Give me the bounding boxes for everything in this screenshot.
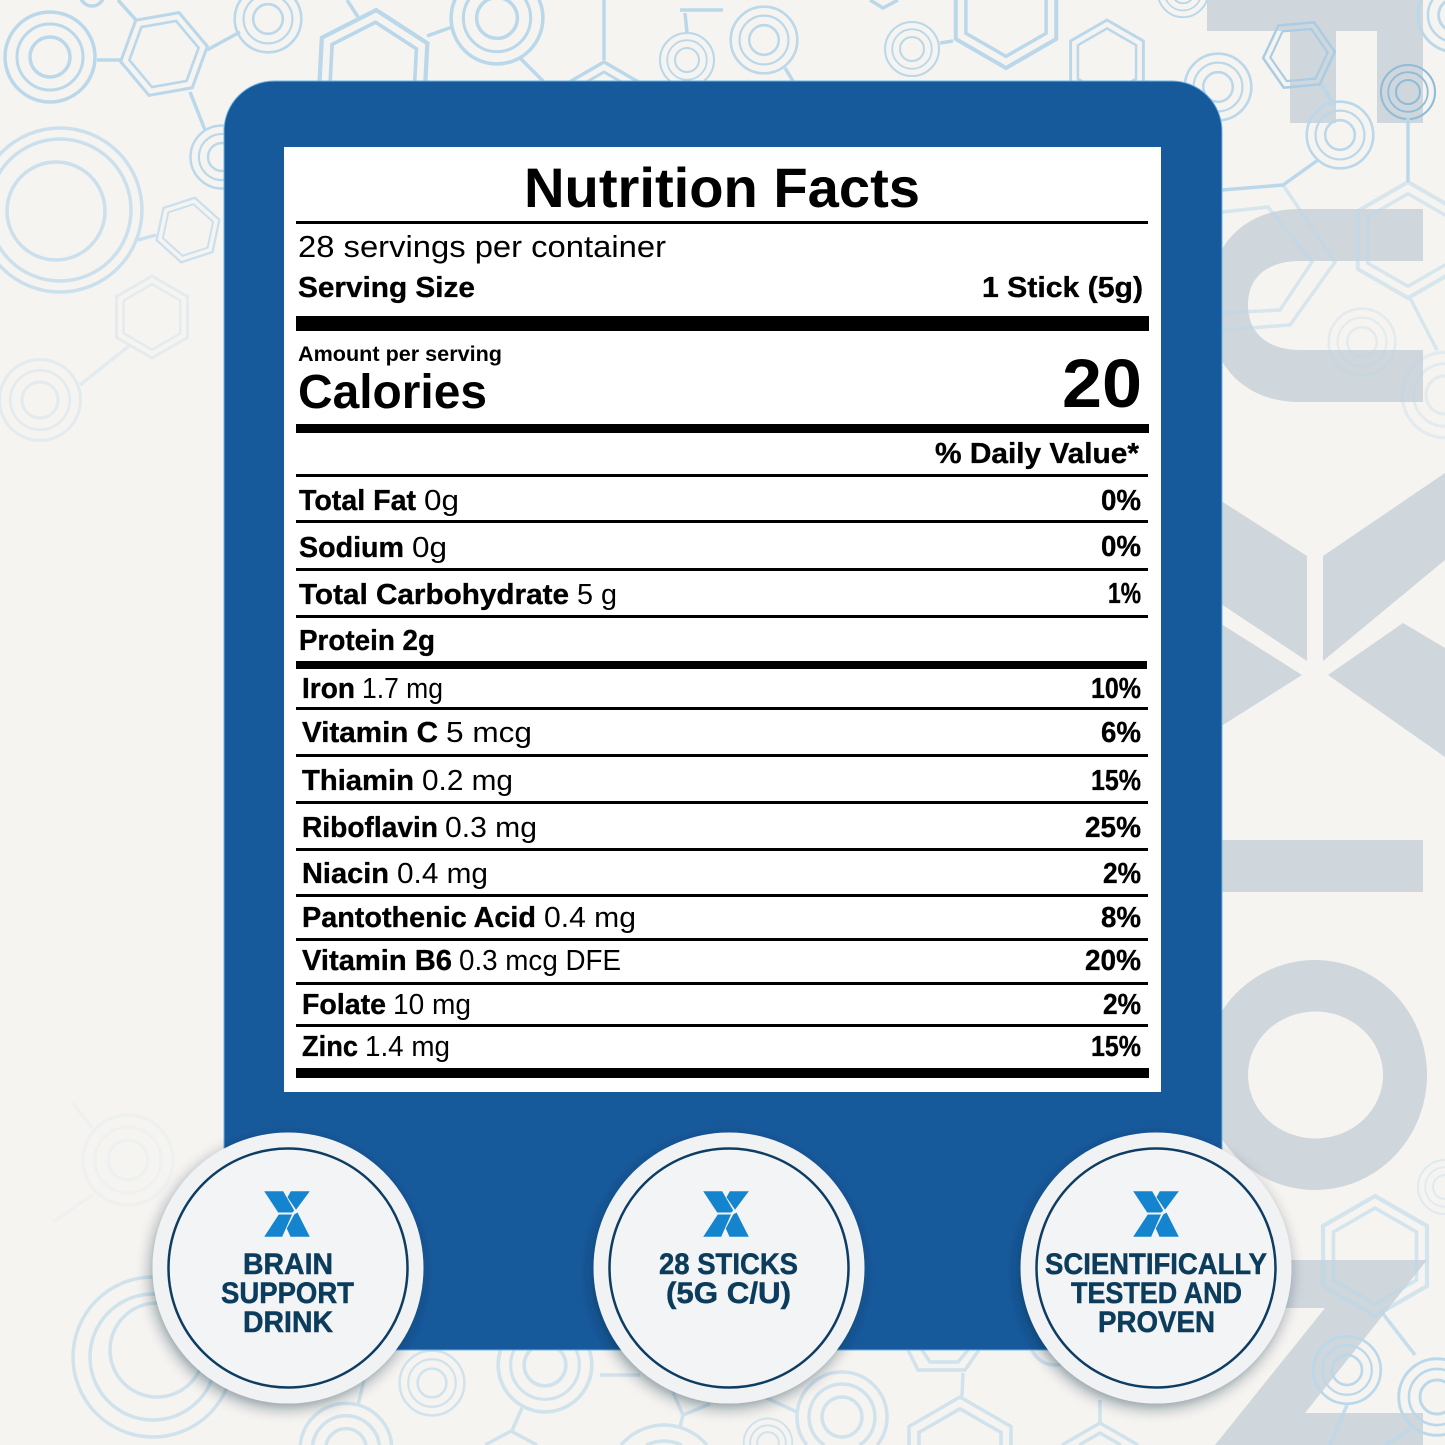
row: niacin: 0.4 mg — [397, 858, 488, 890]
row: folate: Folate — [302, 989, 386, 1021]
badge text: BRAIN — [243, 1248, 333, 1281]
row: zinc: Zinc — [302, 1031, 358, 1063]
calories: 20 — [1062, 345, 1142, 422]
row: riboflavin: 25% — [1085, 812, 1141, 844]
badge text — [659, 1248, 798, 1310]
row: vitamin b6: 0.3 mcg DFE — [459, 945, 621, 977]
row: vitamin c — [302, 717, 1141, 749]
row: vitamin c: Vitamin C — [302, 717, 438, 749]
row: pantothenic acid: Pantothenic Acid — [302, 902, 536, 934]
badge text: DRINK — [243, 1306, 333, 1339]
row: thiamin: Thiamin — [302, 765, 414, 797]
row: niacin: 2% — [1103, 858, 1141, 890]
title: Nutrition Facts — [524, 156, 920, 219]
row: iron: 1.7 mg — [362, 673, 443, 705]
row: niacin: Niacin — [302, 858, 389, 890]
row: thiamin: 15% — [1091, 765, 1141, 797]
row: riboflavin: 0.3 mg — [445, 812, 537, 844]
icon: x logo — [1133, 1191, 1179, 1237]
row: iron: Iron — [302, 673, 355, 705]
row: sodium: 0% — [1101, 531, 1141, 563]
row: vitamin b6: 20% — [1085, 945, 1141, 977]
row: total fat: 0% — [1101, 485, 1141, 517]
row: total carbohydrate: 1% — [1108, 578, 1141, 610]
badge text: SCIENTIFICALLY — [1045, 1248, 1267, 1281]
background watermark letters — [1203, 0, 1445, 1445]
row: thiamin: 0.2 mg — [422, 765, 513, 797]
row: sodium — [299, 531, 1141, 564]
row: total carbohydrate: Total Carbohydrate — [299, 579, 569, 611]
rules — [296, 221, 1149, 1078]
badge text — [1045, 1248, 1267, 1339]
serving size: Serving Size — [298, 272, 475, 304]
amount per serving: Amount per serving — [298, 343, 502, 366]
row: total carbohydrate — [299, 578, 1141, 611]
row: total fat: 0g — [424, 485, 459, 517]
row: sodium: Sodium — [299, 532, 404, 564]
daily value heading: % Daily Value* — [935, 438, 1140, 470]
row: thiamin — [302, 765, 1141, 797]
row: folate: 2% — [1103, 989, 1141, 1021]
badge text — [221, 1248, 354, 1339]
row: iron: 10% — [1091, 673, 1141, 705]
panel: nutrition label — [284, 147, 1161, 1092]
row: pantothenic acid — [302, 902, 1141, 934]
servings per container: 28 servings per container — [298, 229, 666, 264]
row: total fat: Total Fat — [299, 485, 416, 517]
serving size — [298, 272, 1143, 304]
row: vitamin c: 5 mcg — [446, 717, 532, 749]
row: riboflavin — [302, 812, 1141, 844]
badge text: PROVEN — [1098, 1306, 1215, 1339]
row: folate: 10 mg — [393, 989, 471, 1021]
row: protein: Protein 2g — [299, 625, 435, 657]
row: niacin — [302, 858, 1141, 890]
row: pantothenic acid: 8% — [1101, 902, 1141, 934]
row: zinc: 15% — [1091, 1031, 1141, 1063]
badge text: SUPPORT — [221, 1277, 354, 1310]
badge: scientifically tested and proven — [1020, 1132, 1292, 1404]
badge text: 28 STICKS — [659, 1248, 798, 1281]
badge text: TESTED AND — [1071, 1277, 1242, 1310]
panel: blue card — [224, 81, 1222, 1350]
calories: Calories — [298, 366, 487, 419]
row: sodium: 0g — [412, 532, 447, 564]
badge: brain support drink — [152, 1132, 424, 1404]
row: zinc — [302, 1031, 1141, 1063]
badge text: (5G C/U) — [666, 1277, 791, 1310]
row: vitamin b6: Vitamin B6 — [302, 945, 452, 977]
icon: x logo — [264, 1191, 310, 1237]
row: vitamin c: 6% — [1101, 717, 1141, 749]
calories — [298, 345, 1142, 422]
row: total carbohydrate: 5 g — [577, 579, 617, 611]
serving size: 1 Stick (5g) — [982, 272, 1143, 304]
row: pantothenic acid: 0.4 mg — [544, 902, 636, 934]
row: iron — [302, 673, 1141, 705]
badge: 28 sticks — [594, 1132, 864, 1404]
row: folate — [302, 989, 1141, 1021]
row: total fat — [299, 485, 1141, 517]
row: zinc: 1.4 mg — [365, 1031, 450, 1063]
row: vitamin b6 — [302, 945, 1141, 977]
icon: x logo — [703, 1191, 749, 1237]
row: riboflavin: Riboflavin — [302, 812, 438, 844]
